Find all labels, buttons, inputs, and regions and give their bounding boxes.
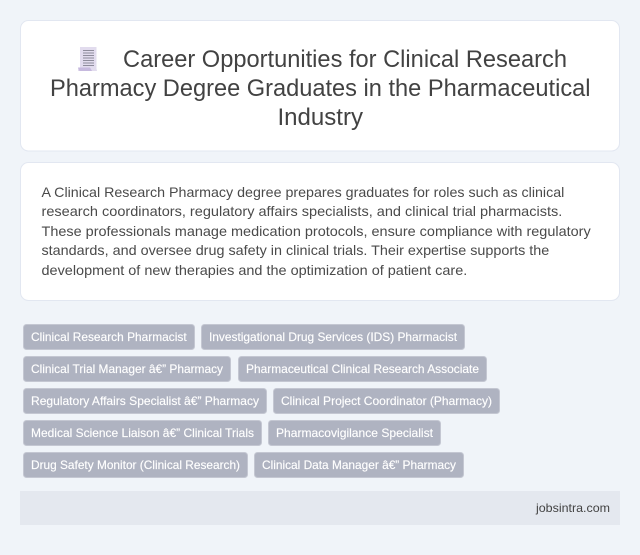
panel: title card — [20, 20, 620, 151]
description text: A Clinical Research Pharmacy degree prepares graduates for roles such as clinical — [42, 184, 564, 200]
description text: development of new therapies and the optimization of patient care. — [42, 262, 467, 278]
footer bar — [20, 491, 620, 525]
tag list — [24, 324, 500, 478]
title text: Industry — [278, 104, 363, 131]
tag: Medical Science Liaison: Medical Science Liaison â€” Clinical Trials — [31, 426, 254, 440]
description text: research coordinators, regulatory affairs specialists, and clinical trial pharmacists. — [42, 203, 562, 219]
tag: Pharmacovigilance Specialist — [268, 420, 440, 446]
panel: description card — [20, 162, 620, 300]
title text: Career Opportunities for Clinical Research — [123, 46, 567, 73]
tag: Drug Safety Monitor: Drug Safety Monitor (Clinical Research) — [31, 458, 240, 472]
tag: Investigational Drug Services — [202, 324, 464, 350]
tag: Clinical Research Pharmacist — [24, 324, 194, 350]
description text: standards, and oversee drug safety in clinical trials. Their expertise supports the — [42, 242, 550, 258]
description text: These professionals manage medication protocols, ensure compliance with regulatory — [42, 223, 591, 239]
tag: Pharmaceutical Clinical Research Associate: Pharmaceutical Clinical Research Associate — [246, 362, 479, 376]
footer text: jobsintra.com — [535, 501, 610, 515]
tag: Investigational Drug Services: Investigational Drug Services (IDS) Pharmacist — [209, 330, 458, 344]
tag: Pharmaceutical Clinical Research Associate — [238, 356, 486, 382]
tag: Clinical Project Coordinator: Clinical Project Coordinator (Pharmacy) — [281, 394, 492, 408]
tag: Drug Safety Monitor — [24, 452, 248, 478]
icon: document scroll — [78, 47, 97, 71]
tag: Pharmacovigilance Specialist: Pharmacovigilance Specialist — [276, 426, 434, 440]
tag: Clinical Data Manager: Clinical Data Manager â€” Pharmacy — [262, 458, 456, 472]
tag: Clinical Data Manager — [254, 452, 464, 478]
tag: Clinical Trial Manager: Clinical Trial Manager â€” Pharmacy — [31, 362, 223, 376]
description text — [42, 184, 591, 278]
tag: Medical Science Liaison — [24, 420, 262, 446]
tag: Regulatory Affairs Specialist — [24, 388, 266, 414]
title text — [50, 46, 590, 131]
tag: Clinical Trial Manager — [24, 356, 230, 382]
tag: Clinical Project Coordinator — [274, 388, 500, 414]
tag: Regulatory Affairs Specialist: Regulatory Affairs Specialist â€” Pharmacy — [31, 394, 259, 408]
title text: Pharmacy Degree Graduates in the Pharmaceutical — [50, 75, 590, 102]
tag: Clinical Research Pharmacist: Clinical Research Pharmacist — [31, 330, 187, 344]
